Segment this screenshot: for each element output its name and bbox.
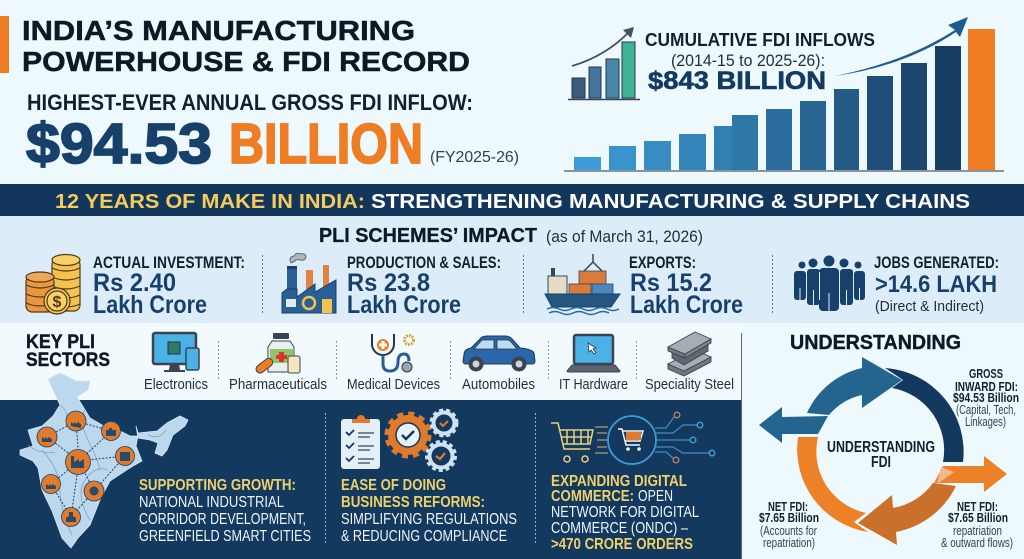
text: net FDI left: NET FDI: (768, 499, 808, 514)
text: gross inward FDI (953, 366, 1019, 429)
arrow: upward trend (835, 17, 968, 76)
stat: actual investment: Rs 2.40 (93, 269, 176, 297)
banner: 12 years of Make in India: STRENGTHENING MANUFACTURING & SUPPLY CHAINS (371, 191, 970, 213)
bar chart: cumulative FDI growth (564, 29, 1004, 171)
text: supporting growth (139, 477, 311, 545)
stat: production and sales: PRODUCTION & SALES: (347, 253, 501, 272)
text: ease of doing business reforms: & REDUCING COMPLIANCE (341, 528, 507, 545)
stat: exports: Rs 15.2 (630, 269, 712, 297)
stat: production and sales: Rs 23.8 (347, 269, 430, 297)
title: INDIA’S MANUFACTURING (22, 15, 415, 46)
sector: electronics: Electronics (144, 376, 208, 393)
icon: digital commerce cart and network (551, 412, 715, 464)
text: expanding digital commerce: EXPANDING DIGITAL (551, 473, 687, 490)
text: net FDI right: $7.65 Billion (948, 510, 1008, 525)
text: ease of doing business reforms: SIMPLIFYING REGULATIONS (341, 511, 517, 528)
headline stat: highest-ever annual gross FDI inflow: BILLION (229, 112, 423, 176)
stat: production and sales (347, 253, 501, 319)
headline stat: highest-ever annual gross FDI inflow: (FY2025-26) (430, 149, 519, 166)
text: net FDI right: repatriation (953, 523, 1002, 538)
cumulative FDI inflows text: CUMULATIVE FDI INFLOWS (645, 30, 875, 50)
panel: key PLI sectors (0, 323, 741, 400)
text: supporting growth: SUPPORTING GROWTH: (139, 477, 296, 494)
text: net FDI right (941, 499, 1013, 550)
panel: understanding FDI (759, 332, 1019, 550)
diagram: FDI cycle arrows (759, 357, 1007, 545)
text: ease of doing business reforms: BUSINESS REFORMS: (341, 494, 485, 511)
cumulative FDI inflows text (645, 30, 875, 95)
stat: exports (629, 253, 743, 319)
banner: 12 years of Make in India: 12 YEARS OF MAKE IN INDIA: (55, 191, 365, 213)
text: expanding digital commerce (551, 473, 699, 553)
text: gross inward FDI: Linkages) (965, 414, 1006, 429)
text: net FDI right: NET FDI: (957, 499, 998, 514)
panel: PLI schemes impact (0, 216, 1024, 323)
stat: exports: Lakh Crore (630, 291, 743, 319)
stat: production and sales: Lakh Crore (347, 291, 461, 319)
map: India with industrial corridors (20, 373, 188, 548)
cumulative FDI inflows text: (2014-15 to 2025-26): (671, 51, 825, 70)
text: understanding FDI centre label (827, 439, 935, 471)
heading: PLI schemes impact: PLI SCHEMES’ IMPACT (319, 225, 537, 247)
sector: IT hardware (559, 335, 628, 393)
sector: automobiles: Automobiles (462, 376, 535, 393)
stat: actual investment: Lakh Crore (93, 291, 207, 319)
text: gross inward FDI: GROSS (969, 366, 1003, 381)
title: POWERHOUSE & FDI RECORD (22, 46, 470, 77)
headline stat: highest-ever annual gross FDI inflow: HIGHEST-EVER ANNUAL GROSS FDI INFLOW: (27, 90, 473, 115)
icon: factory nodes (37, 411, 134, 526)
stat: jobs generated (874, 253, 999, 315)
sector: automobiles (462, 336, 535, 393)
sector: medical devices (347, 334, 440, 393)
icon: group of people (794, 256, 865, 311)
sector: electronics (144, 333, 208, 393)
text: expanding digital commerce: COMMERCE (ONDC) – (551, 520, 688, 537)
icon: small rising bar chart (568, 27, 640, 100)
heading: key PLI sectors (26, 332, 110, 371)
text: supporting growth: NATIONAL INDUSTRIAL (139, 494, 284, 511)
icon: stacked coins (26, 254, 80, 314)
text: supporting growth: GREENFIELD SMART CITIES (139, 528, 311, 545)
text: understanding FDI centre label: UNDERSTANDING (827, 439, 935, 456)
title (0, 15, 470, 77)
heading: PLI schemes impact (319, 225, 703, 247)
heading: PLI schemes impact: (as of March 31, 2026) (546, 227, 703, 246)
stat: exports: EXPORTS: (629, 253, 696, 272)
sector: pharmaceuticals (229, 333, 327, 393)
text: expanding digital commerce: >470 CRORE ORDERS (551, 536, 693, 553)
stat: actual investment: ACTUAL INVESTMENT: (93, 253, 245, 272)
icon: factory (282, 253, 336, 313)
headline stat: highest-ever annual gross FDI inflow (26, 90, 519, 176)
stat: jobs generated: >14.6 LAKH (875, 271, 997, 298)
sector: pharmaceuticals: Pharmaceuticals (229, 376, 327, 393)
text: net FDI left: $7.65 Billion (759, 510, 819, 525)
cumulative FDI inflows text: $843 BILLION (648, 67, 826, 95)
text: ease of doing business reforms: EASE OF DOING (341, 477, 446, 494)
sector: speciality steel: Speciality Steel (645, 376, 734, 393)
text: expanding digital commerce: COMMERCE: (551, 488, 634, 505)
banner: 12 years of Make in India (0, 184, 1024, 216)
icon: cargo ship (545, 254, 620, 314)
text: net FDI left: repatriation) (763, 535, 815, 550)
headline stat: highest-ever annual gross FDI inflow: $94.53 (26, 112, 212, 176)
text: expanding digital commerce: OPEN (638, 488, 673, 505)
icon: checklist and gears (341, 410, 457, 470)
text: expanding digital commerce: NETWORK FOR DIGITAL (551, 504, 699, 521)
stat: jobs generated: (Direct & Indirect) (875, 298, 984, 315)
heading: key PLI sectors: SECTORS (26, 350, 110, 371)
text: net FDI left (759, 499, 819, 550)
sector: speciality steel (645, 332, 734, 393)
heading: understanding: UNDERSTANDING (790, 332, 961, 354)
panel: growth initiatives (0, 333, 742, 559)
icon: stacked coins: $ (53, 294, 62, 311)
stat: actual investment (93, 253, 245, 319)
text: supporting growth: CORRIDOR DEVELOPMENT, (139, 511, 306, 528)
text: ease of doing business reforms (341, 477, 517, 545)
text: understanding FDI centre label: FDI (871, 454, 891, 471)
text: net FDI left: (Accounts for (760, 523, 817, 538)
sector: medical devices: Medical Devices (347, 376, 440, 393)
heading: key PLI sectors: KEY PLI (26, 332, 95, 353)
sector: IT hardware: IT Hardware (559, 376, 628, 393)
